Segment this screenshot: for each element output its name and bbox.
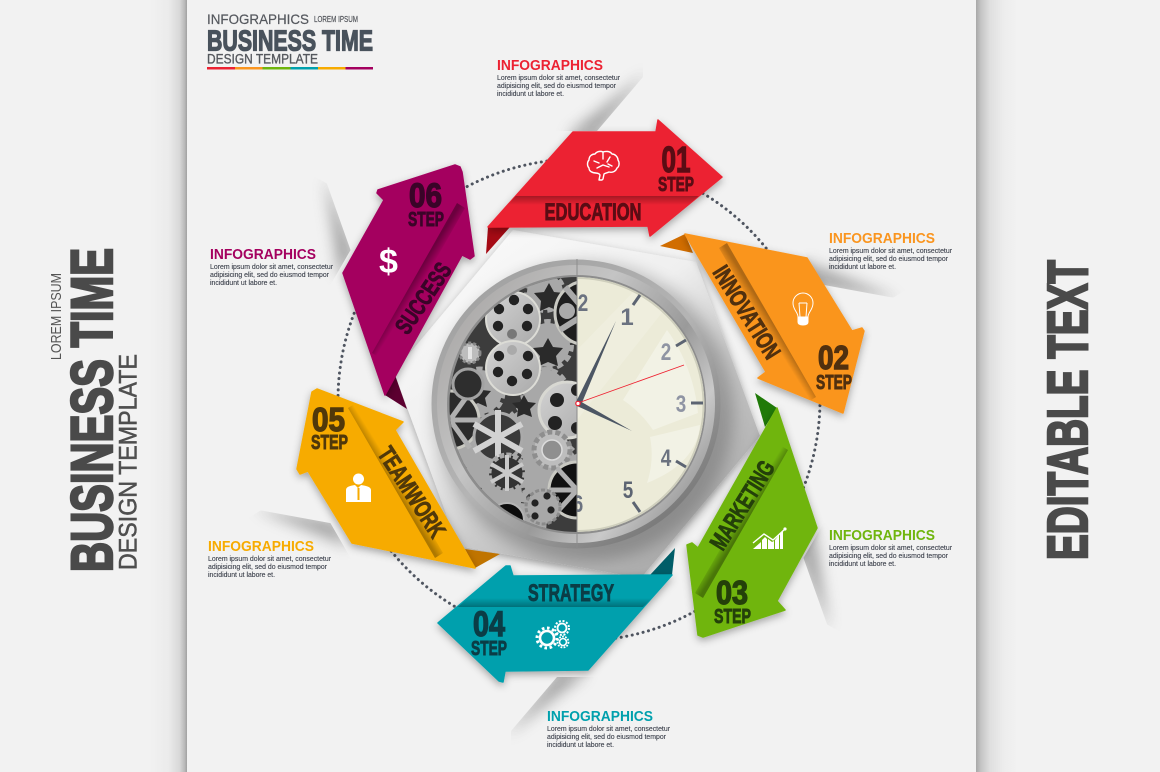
arrow 4: strategy [438,548,675,682]
gear small top left [453,343,483,399]
clock numerals: 4 [661,445,672,472]
clock ticks [633,295,703,512]
header title block: DESIGN TEMPLATE [207,52,318,66]
text block: marketing: Lorem ipsum dolor sit amet, consectetur [829,543,953,552]
text block: success: Lorem ipsum dolor sit amet, consectetur [210,262,334,271]
text block: strategy: Lorem ipsum dolor sit amet, consectetur [547,724,671,733]
text block: success [210,247,334,287]
hexagon plate [394,230,760,578]
header title block [207,11,373,70]
icon: gears [537,621,569,648]
gear small spoked [489,455,525,491]
icon: chart [753,527,787,549]
arrow 2: innovation: INNOVATION [707,261,785,364]
text block: education: Lorem ipsum dolor sit amet, consectetur [497,73,621,82]
clock numerals: 2 [661,339,671,366]
text block: strategy: incididunt ut labore et. [547,740,614,749]
gear disc lower [486,341,540,395]
icon: dollar: $ [379,243,398,281]
arrow 3: marketing [687,393,817,637]
text block: strategy: adipisicing elit, sed do eiusmod tempor [547,732,667,741]
arrow 2: innovation: 02 [818,339,849,376]
text block: success: INFOGRAPHICS [210,247,316,263]
left side title: DESIGN TEMPLATE [114,354,142,570]
left side title: LOREM IPSUM [48,273,65,360]
arrow 4: strategy: STEP [471,637,507,660]
text block: education: incididunt ut labore et. [497,89,564,98]
arrow 5: teamwork: 05 [312,401,345,438]
clock numerals: 5 [623,477,633,504]
arrow 1: education [486,120,722,254]
gear disc upper [486,292,540,346]
clock numerals: 3 [676,391,686,418]
clock [421,259,734,562]
clock face [578,277,704,532]
text block: marketing: incididunt ut labore et. [829,559,896,568]
arrow 2: innovation [660,234,864,413]
clock numerals: 2 [578,290,588,317]
text block: teamwork: incididunt ut labore et. [208,570,275,579]
clock seam [576,259,578,549]
arrow 1: education: 01 [662,139,690,180]
left side title: BUSINESS TIME [60,248,125,572]
paper fold shadows [254,72,900,736]
gear spoked left [450,390,480,450]
text block: innovation: adipisicing elit, sed do eiusmod tempor [829,254,949,263]
text block: innovation: INFOGRAPHICS [829,231,935,247]
left side title [48,248,142,572]
text block: innovation [829,231,953,271]
clock numerals: 1 [620,304,634,331]
header title block: BUSINESS TIME [207,26,373,58]
gear spoked bottom [548,460,576,520]
arrow 6: success [343,165,474,409]
arrow 1: education: EDUCATION [544,199,642,226]
right side title: EDITABLE TEXT [1036,260,1100,560]
gears mechanism [450,277,576,532]
gear snowflake [474,410,522,464]
text block: education: adipisicing elit, sed do eiusmod tempor [497,81,617,90]
text block: success: adipisicing elit, sed do eiusmod tempor [210,270,330,279]
text block: education: INFOGRAPHICS [497,58,603,74]
text block: teamwork: Lorem ipsum dolor sit amet, consectetur [208,554,332,563]
arrow 5: teamwork: STEP [311,431,348,454]
clock numerals: 6 [573,491,583,518]
header title block: LOREM IPSUM [314,15,358,24]
gear holes bottom [498,488,562,526]
arrow 3: marketing: MARKETING [705,456,781,555]
arrow 3: marketing: 03 [716,574,748,611]
text block: innovation: incididunt ut labore et. [829,262,896,271]
text block: success: incididunt ut labore et. [210,278,277,287]
dotted ring [338,159,820,641]
gear concentric [534,432,570,468]
arrow 3: marketing: STEP [714,605,751,628]
text block: teamwork [208,539,332,579]
text block: marketing [829,528,953,568]
text block: strategy [547,709,671,749]
text block: marketing: INFOGRAPHICS [829,528,935,544]
icon: person [346,474,371,502]
arrow 5: teamwork: TEAMWORK [372,442,451,543]
clock numerals [573,290,686,518]
arrow 6: success: 06 [409,177,442,215]
text block: teamwork: adipisicing elit, sed do eiusmod tempor [208,562,328,571]
clock hands [576,321,684,431]
arrow 6: success: STEP [408,208,444,231]
text block: marketing: adipisicing elit, sed do eiusmod tempor [829,551,949,560]
arrow 4: strategy: STRATEGY [528,580,614,607]
text block: strategy: INFOGRAPHICS [547,709,653,725]
icon: brain [588,151,619,180]
arrow 5: teamwork [297,389,500,568]
text block: innovation: Lorem ipsum dolor sit amet, consectetur [829,246,953,255]
arrow 4: strategy: 04 [473,605,505,644]
gear large top right [554,281,576,345]
text block: teamwork: INFOGRAPHICS [208,539,314,555]
arrow 2: innovation: STEP [816,371,852,394]
header title block: INFOGRAPHICS [207,11,309,27]
gear disc centre right [538,380,576,440]
arrow 6: success: SUCCESS [390,258,457,339]
icon: light bulb [793,293,813,325]
text block: education [497,58,621,98]
arrow 1: education: STEP [658,173,694,196]
